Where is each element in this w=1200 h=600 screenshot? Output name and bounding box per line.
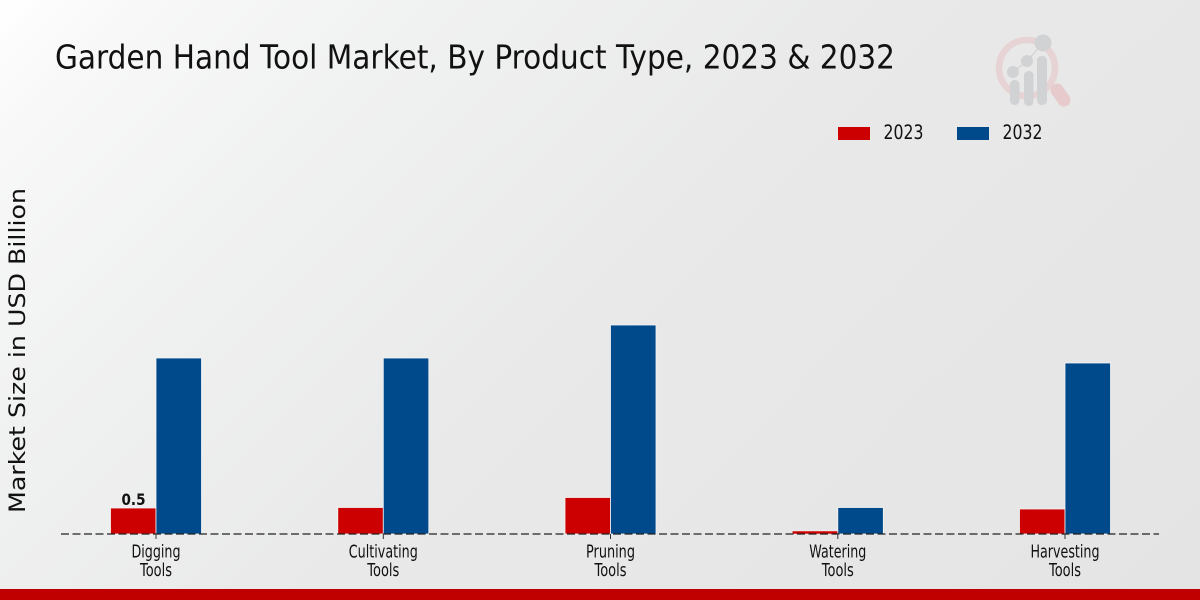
bars: Cultivating Tools [338, 358, 429, 534]
category label: Watering Tools: Watering [809, 542, 866, 562]
bars: Digging Tools [110, 358, 202, 534]
bars: Watering Tools [792, 508, 883, 534]
legend item: 2023 [838, 121, 924, 144]
category label: Harvesting Tools: Harvesting [1030, 542, 1100, 562]
bottom red band [0, 589, 1200, 600]
legend [838, 121, 1042, 144]
category label: Pruning Tools [586, 542, 635, 581]
data label: 0.5 [122, 490, 146, 509]
tick marks [156, 534, 1065, 539]
category label: Harvesting Tools [1030, 542, 1100, 581]
category label: Digging Tools: Tools [139, 561, 172, 581]
bars: Pruning Tools [565, 325, 656, 534]
category label: Cultivating Tools: Tools [367, 561, 399, 581]
legend item: 2023: 2023 [884, 121, 924, 144]
bar chart [61, 325, 1159, 581]
category label: Harvesting Tools: Tools [1048, 561, 1081, 581]
bars: Harvesting Tools [1020, 363, 1110, 534]
category label: Pruning Tools: Tools [594, 561, 626, 581]
category label: Watering Tools [809, 542, 866, 581]
category label: Cultivating Tools: Cultivating [349, 542, 418, 562]
category label: Cultivating Tools [349, 542, 418, 581]
baseline dashed axis [61, 533, 1159, 535]
legend item: 2032 [957, 121, 1042, 144]
category label: Digging Tools [132, 542, 180, 581]
category label: Pruning Tools: Pruning [586, 542, 635, 562]
category label: Digging Tools: Digging [132, 542, 180, 562]
legend item: 2032: 2032 [1002, 121, 1042, 144]
watermark logo icon [999, 34, 1064, 106]
y axis label: Market Size in USD Billion [5, 188, 31, 513]
title: Garden Hand Tool Market, By Product Type, 2023 & 2032 [55, 38, 895, 76]
category label: Watering Tools: Tools [821, 561, 854, 581]
